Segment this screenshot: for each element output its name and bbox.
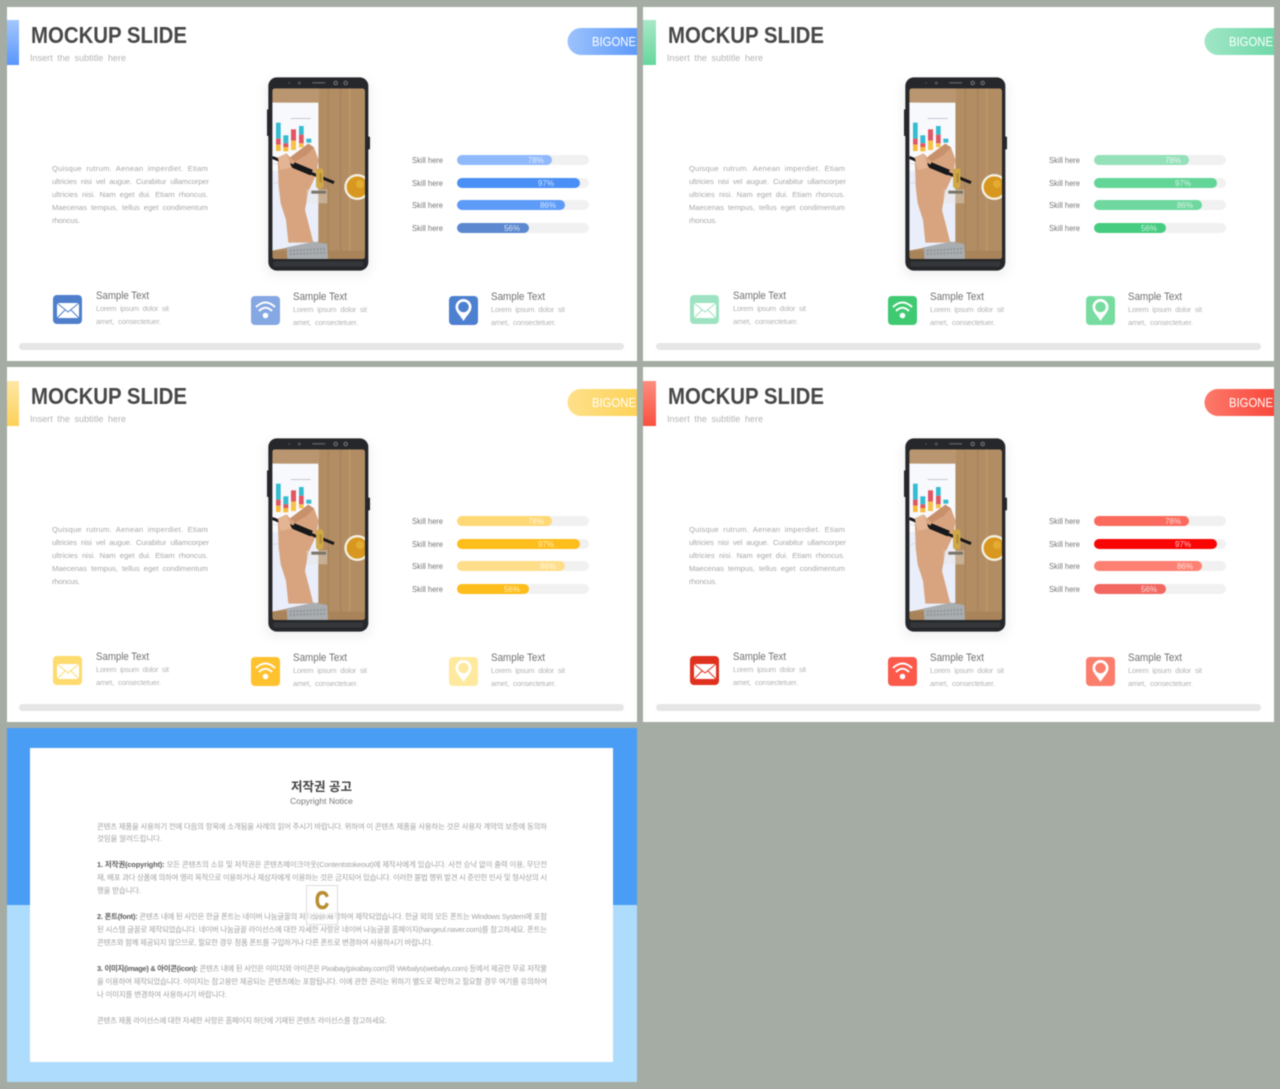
skill bar 86%: 86% (1177, 201, 1193, 210)
notice intro: 콘텐츠 제품을 사용하기 전에 다음의 항목에 소개됨을 사례의 읽어 주시기 바랍니다. 위하여 이 콘텐츠 제품을 사용하는 것은 사용자 계약의 보증에 동의하 (97, 822, 547, 831)
skill bar 56%: Skill here (1049, 223, 1080, 233)
subtitle: Insert the subtitle here (30, 53, 126, 63)
title: MOCKUP SLIDE (668, 22, 824, 48)
skill bar 97% (1049, 539, 1226, 549)
skill bar 97%: Skill here (412, 178, 443, 188)
text: wifi item: amet, consectetuer. (930, 318, 995, 327)
text: wifi item: Lorem ipsum dolor sit (293, 666, 368, 675)
skill bar 86%: 86% (1177, 562, 1193, 571)
text: location item: Sample Text (1128, 652, 1182, 664)
subtitle: Insert the subtitle here (667, 414, 763, 424)
skill bar 56% (1049, 584, 1226, 594)
brand pill: BIGONE (592, 395, 636, 410)
text: mail item: amet, consectetuer. (96, 317, 161, 326)
skill bar 86%: Skill here (412, 561, 443, 571)
skill bar 86% (1049, 200, 1226, 210)
title: MOCKUP SLIDE (31, 22, 187, 48)
text: location item: Sample Text (1128, 291, 1182, 303)
bottom scroll bar (656, 343, 1261, 350)
body paragraph: Maecenas tempus, tellus eget condimentum (689, 203, 845, 212)
accent tab (7, 381, 19, 426)
accent tab (643, 381, 656, 426)
watermark stamp (306, 886, 338, 924)
text: mail item: Sample Text (733, 290, 786, 302)
skill bar 78% (412, 155, 589, 165)
text: location item (491, 291, 566, 327)
body paragraph (689, 164, 846, 225)
skill bars chart (412, 155, 589, 233)
body paragraph: rhoncus. (52, 577, 80, 586)
text: mail item (96, 290, 170, 326)
notice section 3: 3. 이미지(image) & 아이콘(icon): 콘텐츠 내에 된 사인은 이미지와 아이콘은 Pixabay(pixabay.com)와 Webalys(webalys.com) 등에서 제공한 무료 저작물 (97, 964, 547, 973)
notice section 2: 콘텐츠와 함께 제공되지 않으므로, 필요한 경우 정품 폰트를 구입하거나 다른 폰트로 변경하여 사용하시기 바랍니다. (97, 938, 433, 947)
body paragraph: Maecenas tempus, tellus eget condimentum (52, 203, 208, 212)
text: wifi item (930, 652, 1005, 688)
text: mail item: amet, consectetuer. (733, 678, 798, 687)
skill bar 78%: 78% (1165, 156, 1181, 165)
skill bar 97%: Skill here (1049, 178, 1080, 188)
notice footer line: 콘텐츠 제품 라이선스에 대한 자세한 사항은 홈페이지 하단에 기재된 콘텐츠 라이선스를 참고하세요. (97, 1016, 387, 1025)
skill bar 97%: 97% (1175, 179, 1191, 188)
notice section 3 (97, 964, 547, 999)
text: mail item: Lorem ipsum dolor sit (96, 304, 170, 313)
skill bar 86%: Skill here (412, 200, 443, 210)
text: mail item (733, 651, 807, 687)
text: wifi item: Lorem ipsum dolor sit (930, 666, 1005, 675)
notice subheading: Copyright Notice (290, 796, 353, 806)
text: mail item: Lorem ipsum dolor sit (733, 304, 807, 313)
text: mail item: Sample Text (96, 290, 149, 302)
skill bar 97%: Skill here (1049, 539, 1080, 549)
skill bar 86%: 86% (540, 201, 556, 210)
body paragraph: Maecenas tempus, tellus eget condimentum (689, 564, 845, 573)
skill bar 56%: 56% (504, 224, 520, 233)
skill bar 78% (1049, 155, 1226, 165)
icon: mail (690, 295, 719, 324)
text: location item: amet, consectetuer. (491, 318, 556, 327)
skill bar 86% (1049, 561, 1226, 571)
skill bar 86%: 86% (540, 562, 556, 571)
brand pill: BIGONE (1229, 34, 1273, 49)
skill bar 56%: 56% (1141, 585, 1157, 594)
body paragraph: Maecenas tempus, tellus eget condimentum (52, 564, 208, 573)
body paragraph: ultricies nisi vel augue. Curabitur ullamcorper (689, 538, 846, 547)
skill bar 56% (412, 584, 589, 594)
text: wifi item: Lorem ipsum dolor sit (293, 305, 368, 314)
text: wifi item (293, 652, 368, 688)
skill bar 97% (412, 539, 589, 549)
skill bar 86%: Skill here (1049, 561, 1080, 571)
icon: location pin (1086, 296, 1115, 325)
icon: location pin (449, 296, 478, 325)
notice section 1: 행을 받습니다. (97, 886, 141, 895)
text: wifi item (293, 291, 368, 327)
notice section 2 (97, 912, 547, 947)
skill bars chart (1049, 516, 1226, 594)
icon: location pin (449, 657, 478, 686)
text: location item: Lorem ipsum dolor sit (491, 305, 566, 314)
skill bar 97%: Skill here (412, 539, 443, 549)
skill bar 56% (412, 223, 589, 233)
notice section 3: 나 이미지를 변경하여 사용하시기 바랍니다. (97, 990, 227, 999)
phone mockup (263, 77, 372, 277)
body paragraph: rhoncus. (52, 216, 80, 225)
icon: location pin (1086, 657, 1115, 686)
text: location item: amet, consectetuer. (1128, 679, 1193, 688)
text: location item: Lorem ipsum dolor sit (1128, 666, 1203, 675)
notice section 1: 1. 저작권(copyright): 모든 콘텐츠의 소유 및 저작권은 콘텐츠메이크아웃(Contentstokeout)에 제작사에게 있습니다. 사전 승낙 없이 출력 이용, 무단전 (97, 860, 547, 869)
skill bar 97% (1049, 178, 1226, 188)
text: mail item: Sample Text (96, 651, 149, 663)
notice section 3: 을 이용하여 제작되었습니다. 이미지는 참고용만 제공되는 콘텐츠에는 포함됩니다. 이에 관한 권리는 위하기 별도로 확인하고 필요할 경우 여기를 유의하여 (97, 977, 547, 986)
skill bars chart (412, 516, 589, 594)
text: wifi item: amet, consectetuer. (293, 679, 358, 688)
text: wifi item: Sample Text (930, 291, 984, 303)
text: location item: amet, consectetuer. (1128, 318, 1193, 327)
brand pill (1204, 28, 1274, 55)
body paragraph: ultricies nisi vel augue. Curabitur ullamcorper (52, 177, 209, 186)
body paragraph: ultricies nisi. Nam eget dui. Etiam rhoncus. (689, 190, 845, 199)
body paragraph: ultricies nisi. Nam eget dui. Etiam rhoncus. (52, 551, 208, 560)
skill bar 78%: 78% (1165, 517, 1181, 526)
text: location item (491, 652, 566, 688)
body paragraph (689, 525, 846, 586)
skill bar 56%: 56% (1141, 224, 1157, 233)
body paragraph (52, 164, 209, 225)
title: MOCKUP SLIDE (668, 383, 824, 409)
text: location item (1128, 291, 1203, 327)
body paragraph: Quisque rutrum. Aenean imperdiet. Etiam (689, 525, 845, 534)
icon: mail (53, 295, 82, 324)
skill bar 56%: 56% (504, 585, 520, 594)
panel: copyright notice (7, 728, 637, 1082)
brand pill (568, 28, 637, 55)
skill bar 78%: 78% (528, 156, 544, 165)
phone mockup (900, 77, 1009, 277)
text: mail item: amet, consectetuer. (733, 317, 798, 326)
text: wifi item: Sample Text (930, 652, 984, 664)
brand pill: BIGONE (592, 34, 636, 49)
body paragraph: ultricies nisi vel augue. Curabitur ullamcorper (52, 538, 209, 547)
text: wifi item (930, 291, 1005, 327)
brand pill (568, 389, 637, 416)
title: MOCKUP SLIDE (31, 383, 187, 409)
text: wifi item: amet, consectetuer. (930, 679, 995, 688)
bottom scroll bar (19, 704, 624, 711)
text: location item (1128, 652, 1203, 688)
panel: red mockup slide (643, 367, 1274, 722)
body paragraph: rhoncus. (689, 216, 717, 225)
icon: wifi (888, 657, 917, 686)
skill bar 78%: Skill here (412, 155, 443, 165)
notice section 1 (97, 860, 547, 895)
notice section 1: 재, 배포 과다 상품에 의하여 영리 목적으로 이용하거나 제삼자에게 이용하는 것은 금지되어 있습니다. 이러한 불법 행위 발견 시 준민한 민사 및 형사상의 시 (97, 873, 547, 882)
text: location item: Sample Text (491, 291, 545, 303)
icon: wifi (251, 296, 280, 325)
phone mockup (900, 438, 1009, 638)
panel: green mockup slide (643, 7, 1274, 361)
text: location item: Lorem ipsum dolor sit (491, 666, 566, 675)
skill bar 78%: Skill here (1049, 516, 1080, 526)
text: mail item: amet, consectetuer. (96, 678, 161, 687)
skill bar 86% (412, 561, 589, 571)
body paragraph: Quisque rutrum. Aenean imperdiet. Etiam (52, 164, 208, 173)
phone mockup (263, 438, 372, 638)
body paragraph (52, 525, 209, 586)
skill bar 97% (412, 178, 589, 188)
bottom scroll bar (19, 343, 624, 350)
text: mail item: Lorem ipsum dolor sit (96, 665, 170, 674)
icon: mail (53, 656, 82, 685)
skill bar 97%: 97% (1175, 540, 1191, 549)
skill bar 56%: Skill here (412, 584, 443, 594)
text: mail item (96, 651, 170, 687)
text: mail item: Sample Text (733, 651, 786, 663)
skill bar 56%: Skill here (412, 223, 443, 233)
skill bar 78% (412, 516, 589, 526)
brand pill: BIGONE (1229, 395, 1273, 410)
skill bar 56%: Skill here (1049, 584, 1080, 594)
text: mail item: Lorem ipsum dolor sit (733, 665, 807, 674)
notice intro: 것임을 알려드립니다. (97, 834, 162, 843)
body paragraph: ultricies nisi. Nam eget dui. Etiam rhoncus. (689, 551, 845, 560)
watermark stamp: CUSTOM (311, 915, 333, 921)
icon: wifi (888, 296, 917, 325)
skill bar 78%: Skill here (1049, 155, 1080, 165)
body paragraph: Quisque rutrum. Aenean imperdiet. Etiam (52, 525, 208, 534)
text: wifi item: Lorem ipsum dolor sit (930, 305, 1005, 314)
text: mail item (733, 290, 807, 326)
text: wifi item: Sample Text (293, 652, 347, 664)
skill bars chart (1049, 155, 1226, 233)
accent tab (643, 20, 656, 65)
skill bar 56% (1049, 223, 1226, 233)
skill bar 78%: 78% (528, 517, 544, 526)
body paragraph: rhoncus. (689, 577, 717, 586)
icon: wifi (251, 657, 280, 686)
text: location item: Sample Text (491, 652, 545, 664)
brand pill (1204, 389, 1274, 416)
notice intro (97, 822, 547, 843)
text: wifi item: Sample Text (293, 291, 347, 303)
body paragraph: ultricies nisi vel augue. Curabitur ullamcorper (689, 177, 846, 186)
text: location item: Lorem ipsum dolor sit (1128, 305, 1203, 314)
text: wifi item: amet, consectetuer. (293, 318, 358, 327)
notice heading: 저작권 공고 (291, 779, 352, 794)
notice section 2: 된 시스템 글꼴로 제작되었습니다. 네이버 나눔글꼴 라이선스에 대한 자세한 사항은 네이버 나눔글꼴 홈페이지(hangeul.naver.com)를 참고하세요. 폰트는 (97, 925, 547, 934)
skill bar 86%: Skill here (1049, 200, 1080, 210)
skill bar 86% (412, 200, 589, 210)
skill bar 78%: Skill here (412, 516, 443, 526)
panel: yellow mockup slide (7, 367, 637, 722)
icon: mail (690, 656, 719, 685)
body paragraph: Quisque rutrum. Aenean imperdiet. Etiam (689, 164, 845, 173)
skill bar 97%: 97% (538, 179, 554, 188)
text: location item: amet, consectetuer. (491, 679, 556, 688)
skill bar 97%: 97% (538, 540, 554, 549)
bottom scroll bar (656, 704, 1261, 711)
skill bar 78% (1049, 516, 1226, 526)
subtitle: Insert the subtitle here (667, 53, 763, 63)
body paragraph: ultricies nisi. Nam eget dui. Etiam rhoncus. (52, 190, 208, 199)
accent tab (7, 20, 19, 65)
subtitle: Insert the subtitle here (30, 414, 126, 424)
notice section 2: 2. 폰트(font): 콘텐츠 내에 된 사인은 한글 폰트는 네이버 나눔글꼴의 저작물을 제작하여 제작되었습니다. 한글 외의 모든 폰트는 Windows System에 포함 (97, 912, 547, 921)
panel: blue mockup slide (7, 7, 637, 361)
watermark stamp: C (315, 887, 329, 915)
